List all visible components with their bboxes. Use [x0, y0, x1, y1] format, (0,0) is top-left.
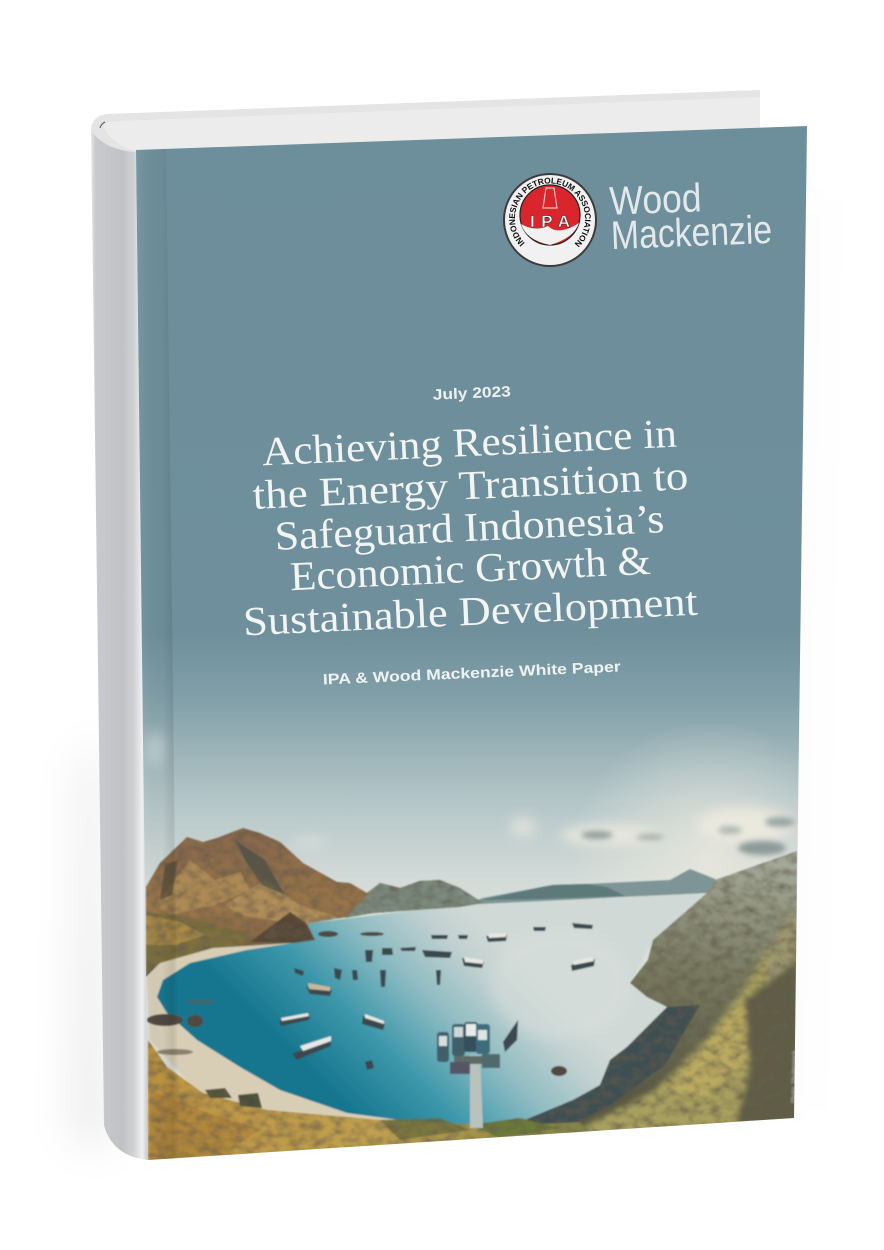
large mountain	[146, 828, 483, 977]
photo scene: bay with mountains and boats	[146, 828, 798, 1170]
dark coastal rocks	[147, 931, 567, 1076]
title: the Energy Transition to	[252, 452, 689, 518]
title: Economic Growth &	[289, 537, 652, 599]
soft drop shadow	[70, 200, 816, 1150]
book front cover	[130, 120, 820, 1180]
jetty pier	[470, 1055, 483, 1128]
sandy beach	[147, 943, 400, 1125]
spine hinge fold on cover	[136, 149, 179, 1160]
logo: Wood Mackenzie wordmark	[609, 176, 773, 258]
right hillside	[513, 851, 797, 1140]
sun glow clouds	[144, 730, 798, 880]
cover sky background	[130, 120, 820, 1180]
title: Safeguard Indonesia’s	[274, 495, 665, 559]
tiny vertical photo credit: Photo: Shutterstock	[791, 1050, 798, 1103]
book page block and top edge	[91, 90, 760, 152]
water bay	[150, 893, 707, 1130]
title	[242, 410, 699, 644]
logo: Wood Mackenzie wordmark: Wood	[609, 176, 702, 224]
subtitle: IPA & Wood Mackenzie White Paper	[323, 659, 621, 688]
distant hills	[478, 868, 716, 905]
foreground grass	[148, 1040, 600, 1170]
logo ring lettering: INDONESIAN PETROLEUM ASSOCIATION	[509, 178, 591, 248]
logo: Indonesian Petroleum Association	[503, 173, 597, 267]
book mockup illustration	[70, 90, 807, 1160]
boats	[279, 923, 595, 1074]
boat cluster at jetty	[437, 1022, 500, 1074]
title: Sustainable Development	[242, 578, 699, 644]
logo IPA letters: IPA	[530, 212, 570, 231]
date: July 2023	[432, 383, 511, 404]
book spine	[91, 130, 148, 1160]
logo: Wood Mackenzie wordmark: Mackenzie	[610, 208, 773, 258]
water highlight	[492, 971, 562, 1036]
title: Achieving Resilience in	[261, 410, 678, 474]
